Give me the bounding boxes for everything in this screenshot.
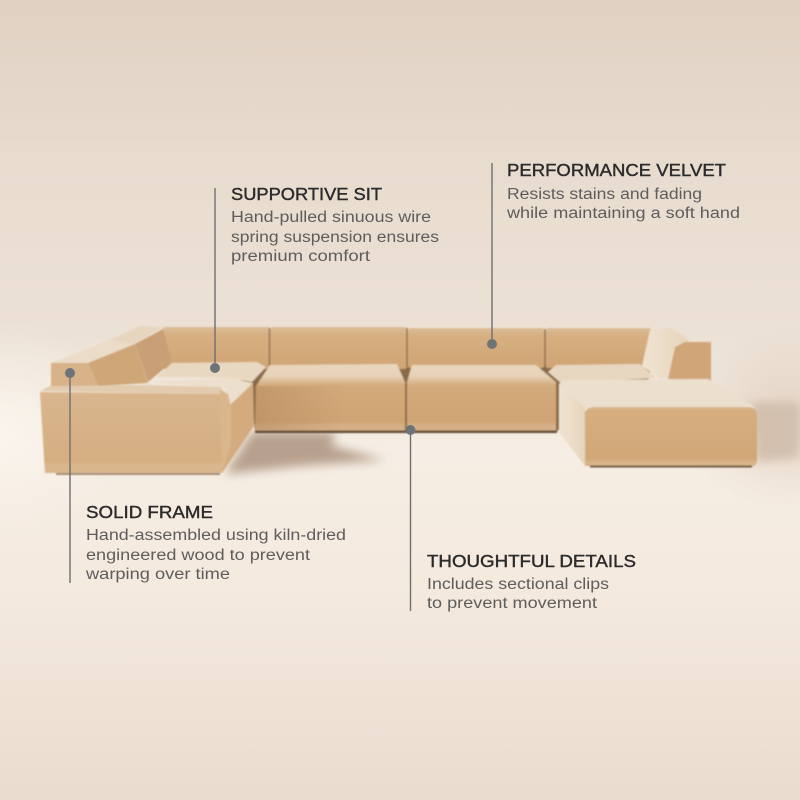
performance velvet heading: PERFORMANCE VELVET: [507, 160, 726, 180]
thoughtful details body: to prevent movement: [427, 595, 598, 612]
left seat top: [148, 378, 253, 408]
back cushion center-right: [408, 328, 544, 368]
right arm inner: [642, 328, 690, 379]
solid frame body: engineered wood to prevent: [86, 547, 311, 564]
back cushion left: [163, 327, 270, 369]
right seat: [548, 364, 656, 383]
callout: solid frame: [65, 368, 346, 583]
left rear arm top: [110, 326, 163, 344]
supportive sit body: Hand-pulled sinuous wire: [231, 209, 431, 226]
left block base line: [56, 473, 220, 475]
left arm top: [51, 340, 135, 363]
center-left seat: [255, 364, 405, 431]
sectional sofa: [40, 326, 757, 474]
solid frame heading: SOLID FRAME: [86, 502, 213, 522]
back cushion right: [546, 328, 652, 368]
corner seat: [157, 362, 266, 382]
left arm end: [51, 363, 98, 388]
solid frame leader: [65, 368, 75, 583]
thoughtful details leader: [406, 425, 416, 611]
seat shade: [255, 386, 345, 430]
performance velvet body: Resists stains and fading: [507, 186, 702, 203]
back cushion center-left: [270, 327, 407, 369]
floor shadows: [225, 402, 800, 474]
left front block top: [40, 385, 227, 394]
sofa dark interior: [163, 340, 650, 431]
supportive sit heading: SUPPORTIVE SIT: [231, 184, 382, 204]
center-right seat: [407, 365, 556, 431]
performance velvet leader: [487, 163, 497, 349]
supportive sit body: spring suspension ensures: [231, 229, 439, 246]
solid frame body: Hand-assembled using kiln-dried: [86, 527, 346, 544]
ottoman top: [559, 379, 756, 412]
ottoman front: [585, 407, 757, 466]
right arm end: [668, 342, 711, 381]
solid frame body: warping over time: [85, 566, 230, 583]
callout: thoughtful details: [406, 425, 636, 612]
thoughtful details heading: THOUGHTFUL DETAILS: [427, 551, 636, 571]
left arm inner face: [88, 344, 148, 386]
back seams: [270, 328, 545, 366]
supportive sit body: premium comfort: [231, 248, 371, 265]
left block corner edge: [220, 390, 231, 473]
supportive sit leader: [210, 188, 220, 373]
base shadow line: [255, 430, 557, 433]
left front block face: [40, 392, 228, 473]
left seat side: [222, 383, 254, 473]
ottoman side: [559, 384, 585, 466]
thoughtful details body: Includes sectional clips: [427, 576, 609, 593]
left rear arm inner face: [135, 329, 172, 382]
performance velvet body: while maintaining a soft hand: [506, 205, 740, 222]
callout: performance velvet: [487, 160, 740, 349]
callout: supportive sit: [210, 184, 439, 373]
